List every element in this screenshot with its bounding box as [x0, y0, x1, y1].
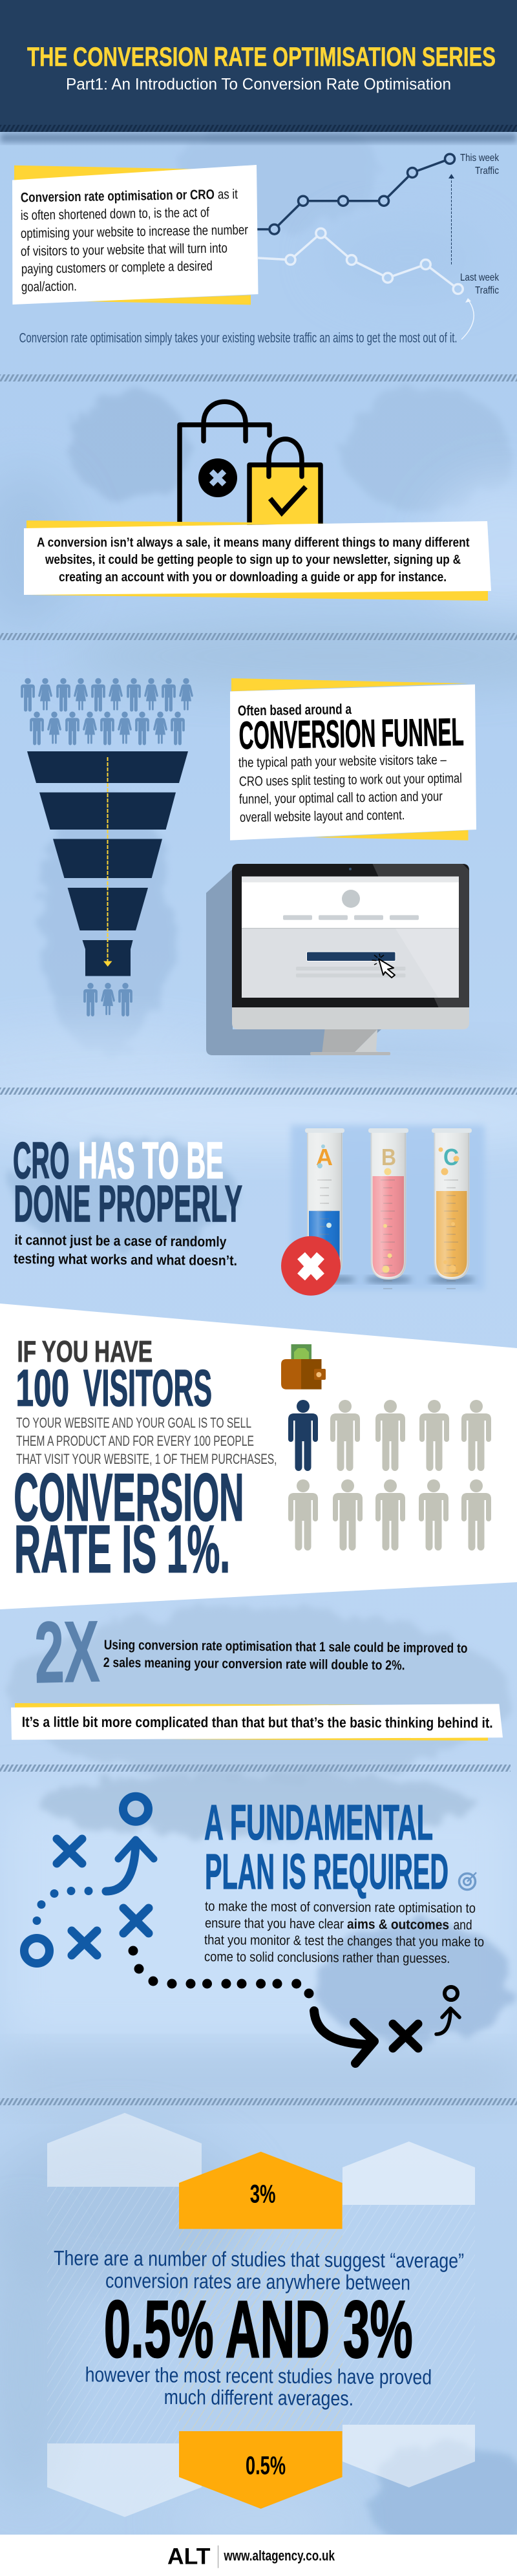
- heading: CRO has to be done properly: DONE PROPERLY: [14, 1175, 242, 1232]
- panel: white visitors section: [0, 1304, 517, 1609]
- this week label: Traffic: [475, 166, 499, 177]
- plan body text: ensure that you have clear: [205, 1916, 344, 1932]
- last week line: [258, 228, 463, 294]
- funnel: [27, 751, 188, 976]
- dashed up arrow: [448, 174, 454, 264]
- explanation text: THEM A PRODUCT AND FOR EVERY 100 PEOPLE: [16, 1433, 254, 1449]
- crowd above funnel: [21, 678, 193, 745]
- tube C: [432, 1128, 472, 1289]
- plan body text: that you monitor & test the changes that you make to: [204, 1933, 484, 1949]
- icon: cursor: [372, 954, 395, 978]
- footer: [0, 2535, 517, 2576]
- curved white arrow: [461, 298, 474, 339]
- last week label: Traffic: [475, 285, 499, 296]
- definition text: [21, 187, 248, 295]
- tube C: C: [443, 1144, 459, 1170]
- icon: target: [459, 1873, 476, 1889]
- divider: [0, 1088, 517, 1095]
- this week line: [257, 154, 455, 234]
- arrow through funnel: [103, 757, 112, 967]
- CRO explanation text: [14, 1232, 237, 1269]
- panel: what is CRO: [12, 165, 258, 305]
- divider: [0, 633, 517, 640]
- stripe columns: [47, 2187, 475, 2443]
- heading: 100 visitors: [16, 1359, 212, 1417]
- plan body text: to make the most of conversion rate optimisation to: [205, 1899, 476, 1916]
- heading: 100 visitors: 100: [16, 1359, 69, 1417]
- lower arrows: [47, 2425, 475, 2517]
- traffic line chart: [257, 153, 500, 339]
- plan body text: aims & outcomes: [347, 1917, 449, 1933]
- header banner: [0, 0, 517, 142]
- tube B: [368, 1128, 408, 1289]
- doubling text: 2 sales meaning your conversion rate will double to 2%.: [103, 1655, 405, 1673]
- definition text: optimising your website to increase the number: [21, 222, 248, 241]
- 3 percent label: 3%: [250, 2180, 275, 2209]
- panel: conversion definition: [24, 521, 491, 601]
- panel body: the typical path your website visitors take –: [238, 753, 447, 770]
- upper arrows: [47, 2113, 475, 2229]
- recent studies text: [85, 2363, 432, 2410]
- 0.5 percent label: 0.5%: [246, 2452, 286, 2480]
- subtitle: Part1: An Introduction To Conversion Rate Optimisation: [66, 75, 451, 93]
- panel body: CRO uses split testing to work out your optimal: [239, 771, 462, 789]
- icon: shopping bags: [180, 402, 321, 527]
- play diagram: blue: [25, 1796, 154, 1963]
- doubling text: [103, 1638, 468, 1673]
- explanation text: THAT VISIT YOUR WEBSITE, 1 OF THEM PURCHASES,: [16, 1451, 277, 1467]
- website url: www.altagency.co.uk: [224, 2548, 335, 2564]
- average rates text: [54, 2246, 464, 2294]
- tube A: [305, 1128, 344, 1289]
- explanation text: TO YOUR WEBSITE AND YOUR GOAL IS TO SELL: [16, 1415, 251, 1431]
- CRO explanation text: testing what works and what doesn’t.: [14, 1250, 237, 1269]
- heading: conversion rate is 1%: RATE IS 1%.: [14, 1512, 230, 1587]
- chart: conversion range arrows: [47, 2113, 475, 2517]
- conversion text: creating an account with you or downloading a guide or app for instance.: [59, 570, 447, 585]
- plan body text: [204, 1899, 484, 1966]
- big 2X: 2X: [34, 1604, 100, 1701]
- panel body: overall website layout and content.: [240, 808, 405, 825]
- people after funnel: [83, 983, 132, 1016]
- definition text: paying customers or complete a desired: [21, 259, 213, 277]
- definition text: is often shortened down to, is the act of: [21, 205, 209, 223]
- monitor stand: [310, 1029, 390, 1055]
- tube B: B: [381, 1144, 396, 1170]
- tube A: A: [316, 1144, 333, 1170]
- recent studies text: however the most recent studies have proved: [85, 2363, 432, 2389]
- this week label: This week: [460, 153, 500, 164]
- panel body: funnel, your optimal call to action and your: [239, 789, 443, 807]
- conversion text: websites, it could be getting people to sign up to your newsletter, signing up &: [45, 553, 461, 567]
- plan body text: and: [453, 1918, 472, 1933]
- definition text: goal/action.: [21, 279, 77, 295]
- CRO explanation text: it cannot just be a case of randomly: [14, 1232, 227, 1250]
- panel body: [238, 753, 462, 825]
- logo: ALT: [167, 2544, 211, 2570]
- play diagram: black: [128, 1946, 459, 2063]
- panel: conversion funnel: [230, 678, 476, 841]
- heading: if you have: IF YOU HAVE: [17, 1335, 153, 1368]
- heading: CRO has to be done properly: CRO: [13, 1132, 70, 1189]
- conversion text: [37, 536, 470, 585]
- definition text: Conversion rate optimisation or CRO: [21, 188, 215, 205]
- average rates text: conversion rates are anywhere between: [105, 2269, 410, 2294]
- icon: monitor: [206, 864, 469, 1055]
- heading: a fundamental plan: [204, 1795, 448, 1900]
- this week label: [460, 153, 500, 177]
- heading: CRO has to be done properly: HAS TO BE: [78, 1132, 224, 1189]
- heading: conversion rate is 1%: [14, 1461, 244, 1587]
- heading: CRO has to be done properly: [13, 1132, 242, 1232]
- people pictogram: 1 in 10: [288, 1400, 491, 1551]
- plan body text: come to solid conclusions rather than guesses.: [204, 1949, 450, 1966]
- definition text: as it: [218, 187, 238, 202]
- definition text: of visitors to your website that will turn into: [21, 241, 227, 259]
- explanation text: [16, 1415, 277, 1467]
- divider: [0, 1765, 511, 1772]
- panel: basic thinking: [11, 1703, 503, 1741]
- divider: [0, 2098, 517, 2105]
- test tubes: [281, 1125, 485, 1296]
- heading: conversion rate is 1%: CONVERSION: [14, 1461, 244, 1536]
- last week label: Last week: [460, 272, 500, 283]
- icon: red cross: [281, 1236, 341, 1296]
- panel kicker: Often based around a: [238, 701, 352, 719]
- heading: 100 visitors: VISITORS: [83, 1359, 212, 1417]
- divider: [0, 374, 517, 381]
- last week label: [460, 272, 500, 296]
- icon: wallet: [281, 1344, 326, 1390]
- monitor shadow: [206, 870, 381, 1055]
- recent studies text: much different averages.: [164, 2385, 353, 2410]
